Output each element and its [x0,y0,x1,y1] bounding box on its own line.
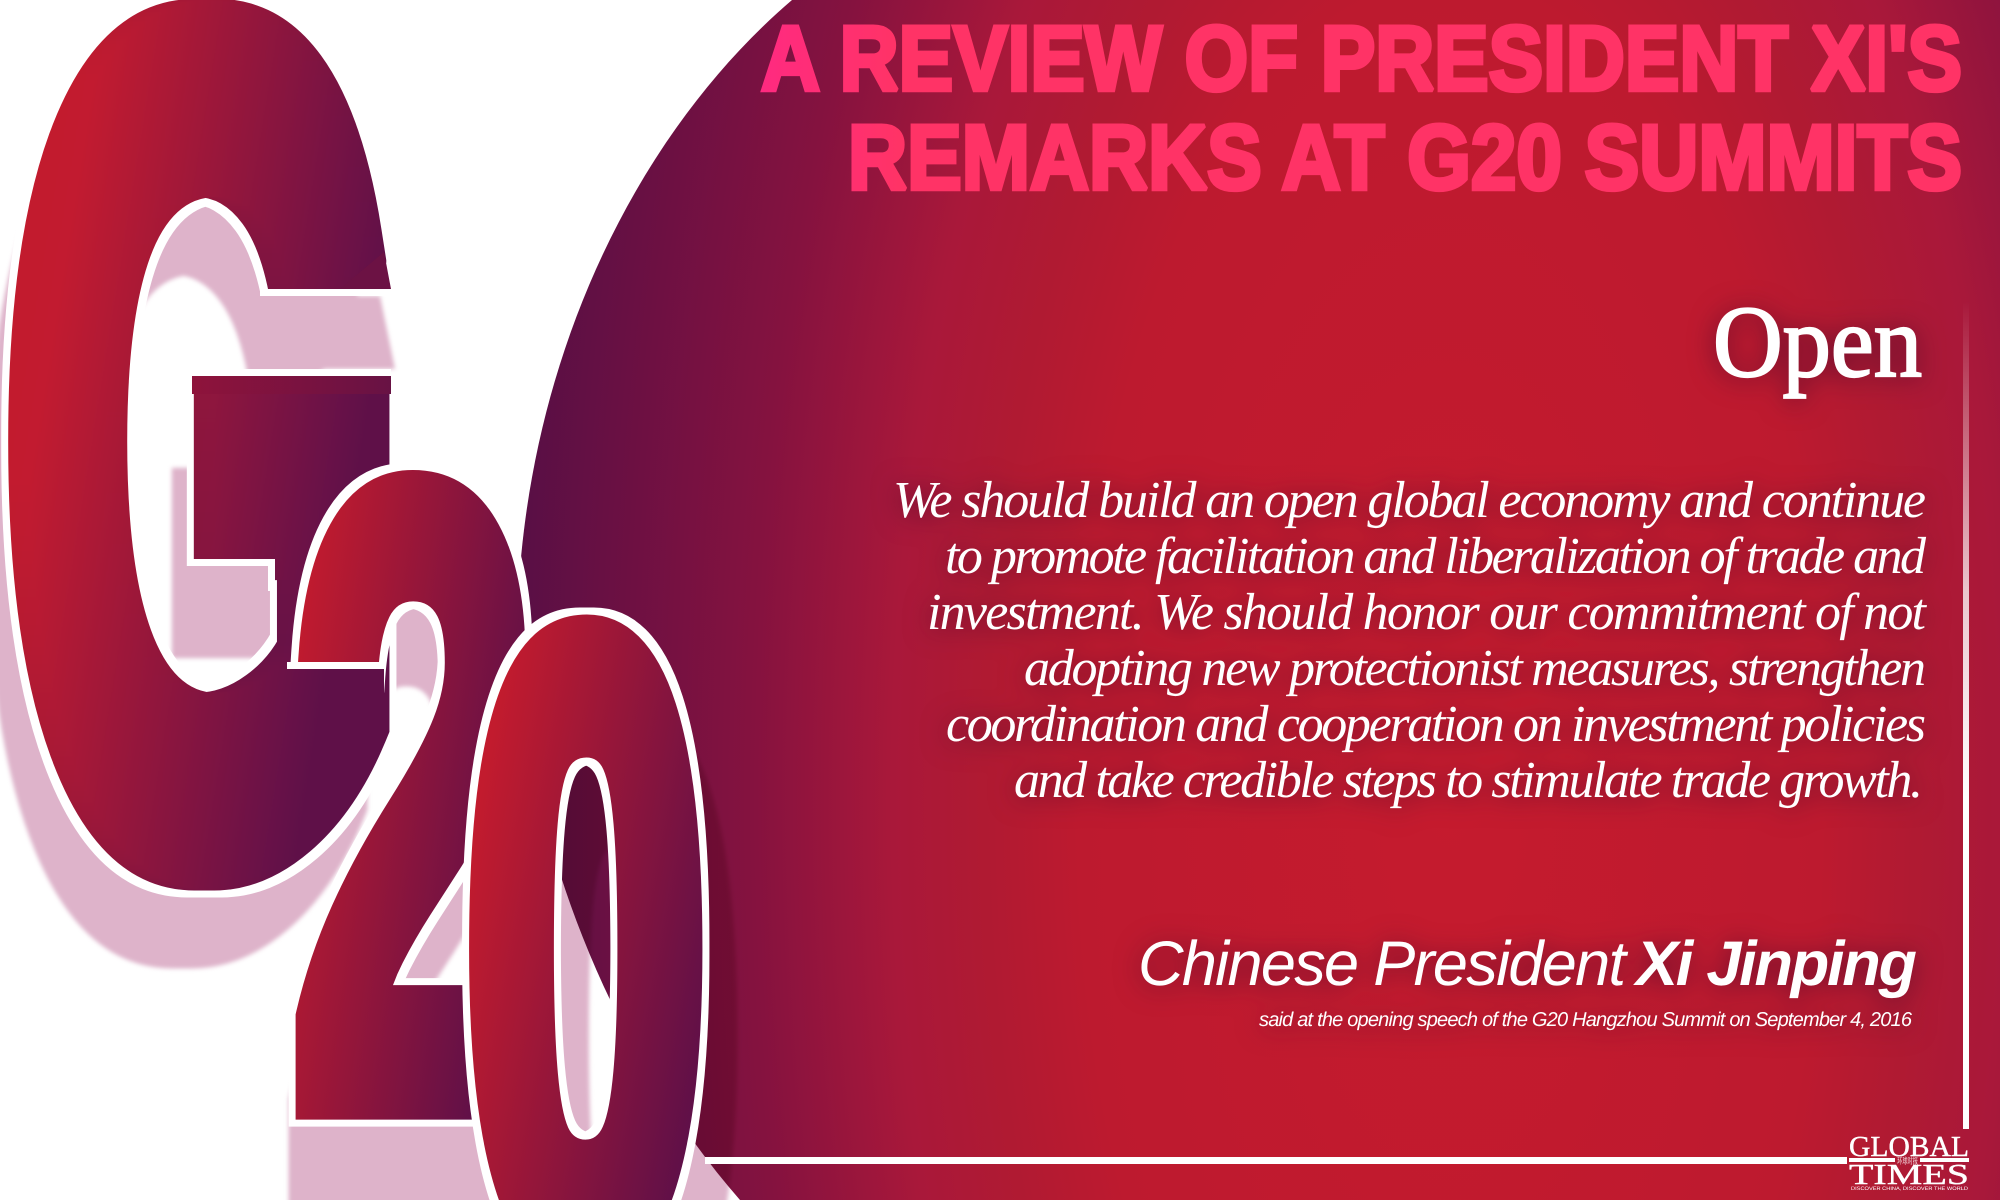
quote text: We should build an open global economy and continue [893,472,1926,529]
quote text: and take credible steps to stimulate trade growth. [1014,752,1923,809]
quote text: coordination and cooperation on investment policies [946,696,1926,753]
frame: vertical line [1963,300,1969,1129]
quote text: to promote facilitation and liberalization of trade and [945,528,1927,585]
attribution: said at the opening speech of the G20 Hangzhou Summit on September 4, 2016 [1259,1009,1913,1031]
quote text: investment. We should honor our commitment of not [927,584,1928,641]
attribution: Xi Jinping [1633,929,1917,999]
frame: horizontal line [705,1157,1847,1164]
quote text [893,472,1928,809]
attribution: Chinese President [1138,929,1628,999]
logo: Global Times: GLOBAL [1849,1131,1969,1163]
attribution [1138,929,1917,1031]
heading: Open: Open [1713,286,1922,399]
logo: Global Times: DISCOVER CHINA, DISCOVER THE WORLD [1851,1186,1968,1192]
background circle panel [518,0,2000,1200]
title [761,8,1962,209]
logo: Global Times: TIMES [1849,1159,1969,1191]
shadow of G20 letters [0,0,743,1200]
logo: Global Times: 环球时报 [1897,1156,1918,1166]
quote text: adopting new protectionist measures, strengthen [1024,640,1926,697]
logo: Global Times [1849,1131,1969,1192]
